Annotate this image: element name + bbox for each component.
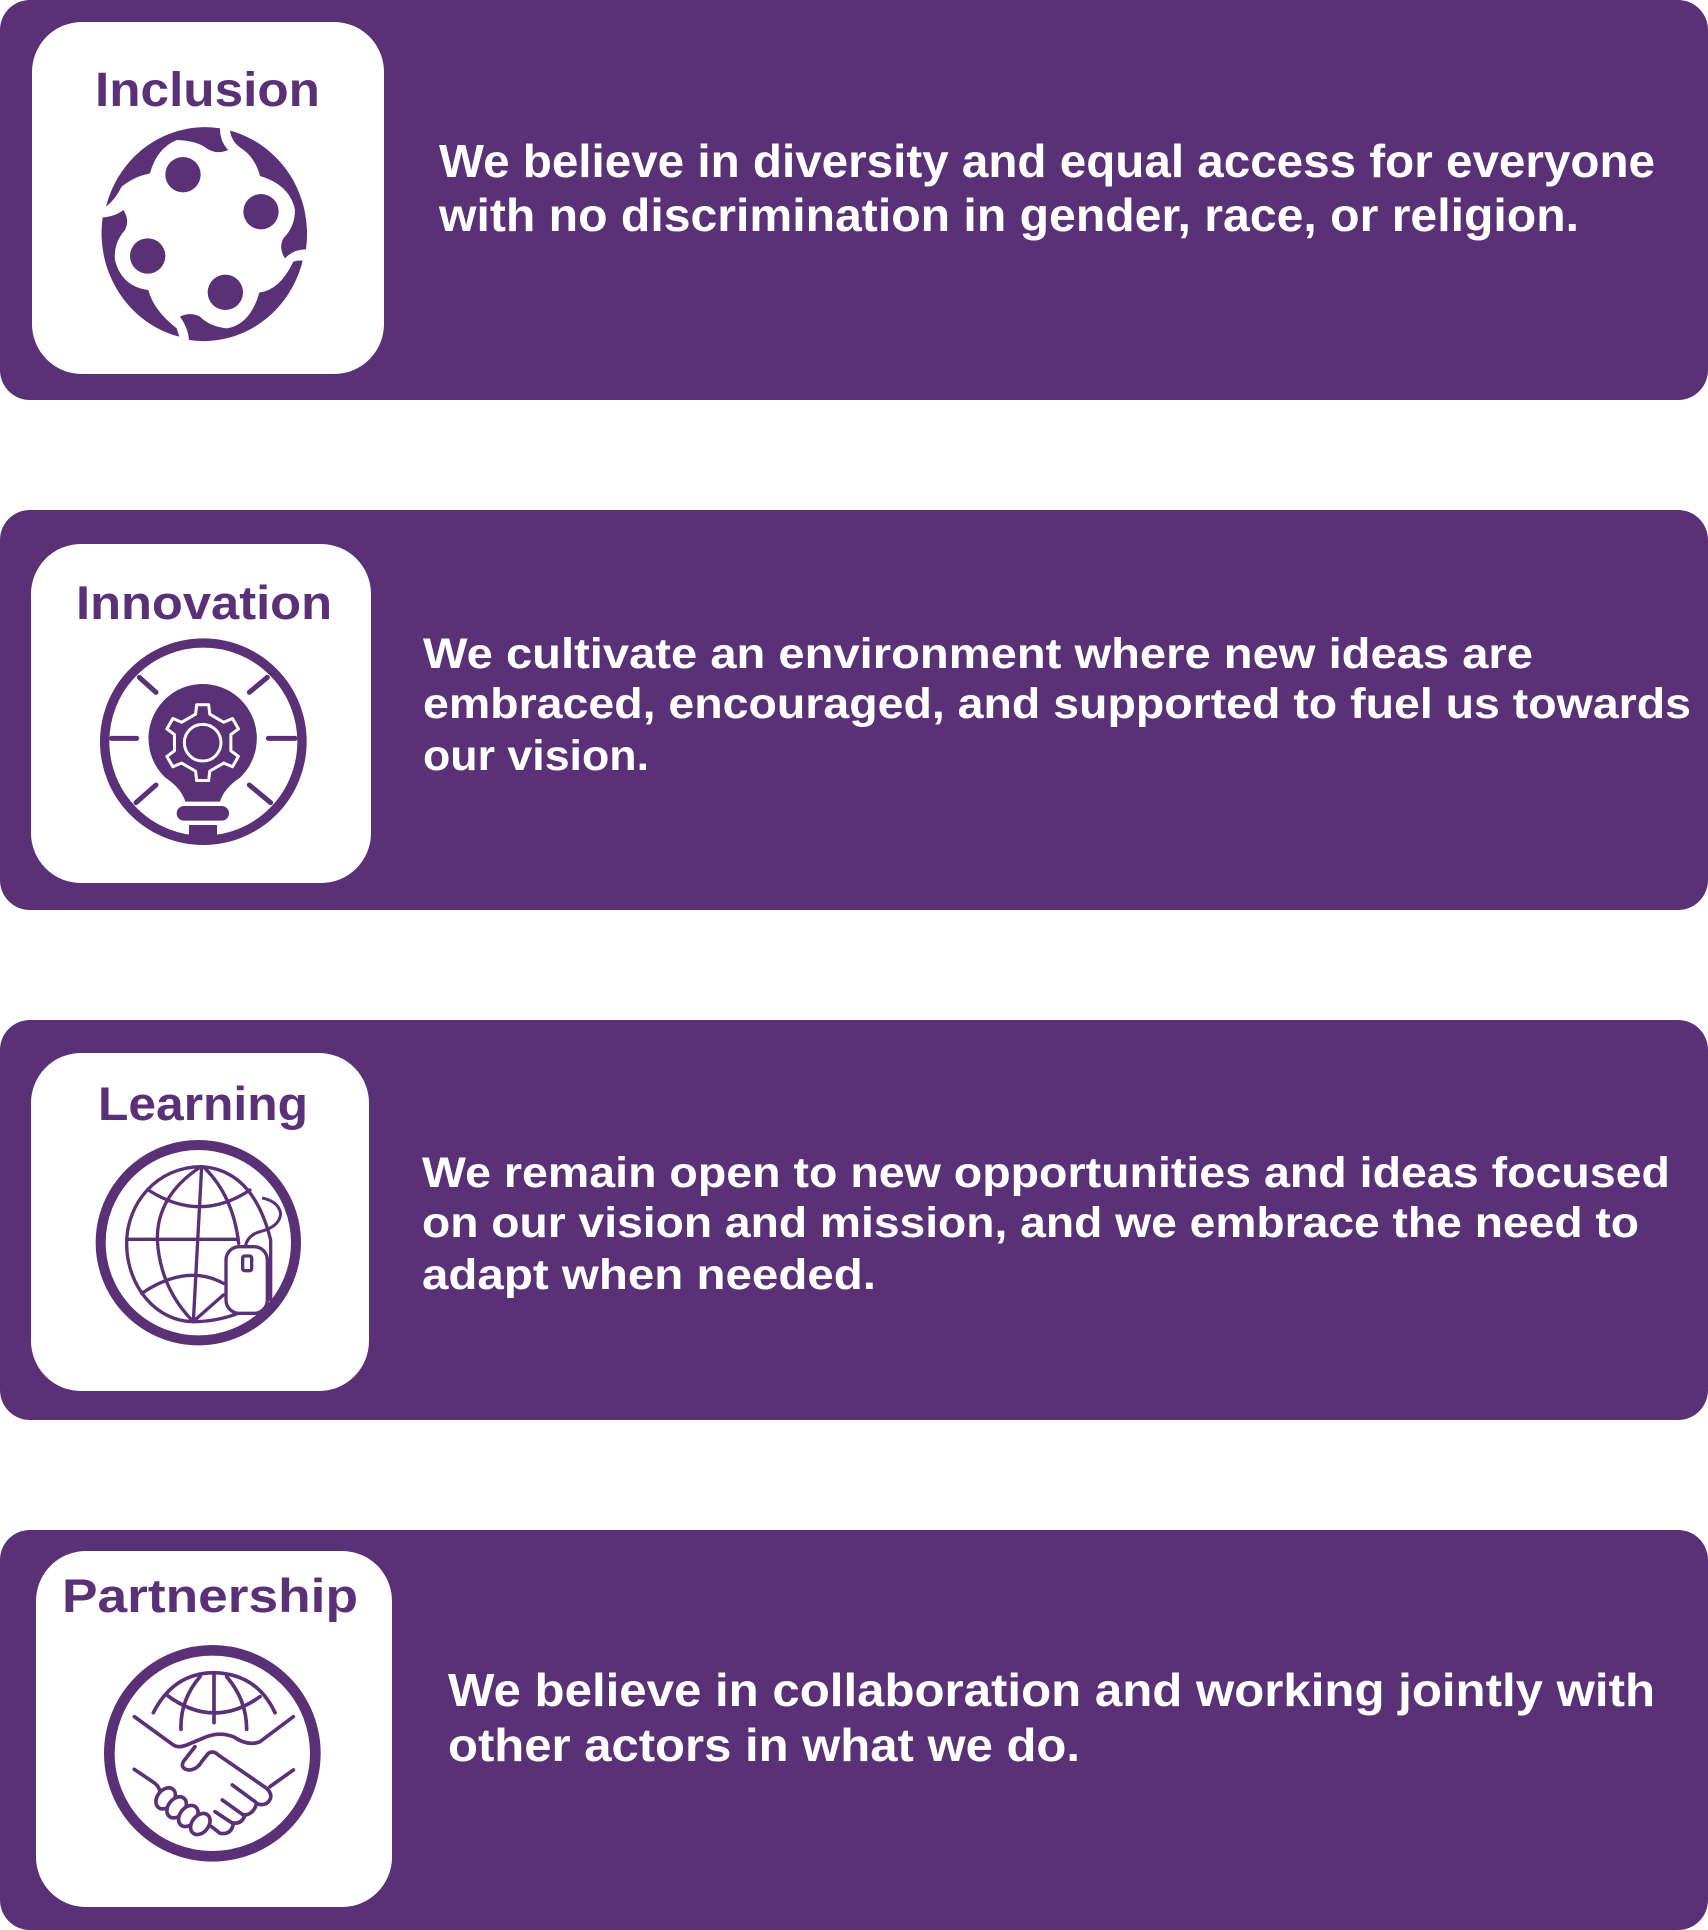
heading: inclusion: Inclusion xyxy=(95,64,320,117)
text: innovation description: our vision. xyxy=(423,732,649,780)
text: innovation description: embraced, encouraged, and supported to fuel us towards xyxy=(423,680,1691,728)
card: inclusion xyxy=(32,22,384,374)
panel: partnership xyxy=(0,1530,1708,1930)
panel: innovation xyxy=(0,510,1708,910)
text: learning description: adapt when needed. xyxy=(422,1251,876,1299)
text: inclusion description: We believe in diversity and equal access for everyone xyxy=(439,135,1655,187)
icon: globe with computer mouse xyxy=(101,1145,296,1340)
heading: learning: Learning xyxy=(98,1077,308,1130)
card: partnership xyxy=(36,1551,392,1907)
text: learning description xyxy=(422,1149,1670,1299)
text: partnership description: We believe in collaboration and working jointly with xyxy=(448,1664,1655,1716)
heading: partnership: Partnership xyxy=(62,1569,358,1622)
card: learning xyxy=(31,1053,369,1391)
text: learning description: We remain open to new opportunities and ideas focused xyxy=(422,1149,1670,1197)
text: partnership description: other actors in what we do. xyxy=(448,1719,1080,1771)
text: inclusion description: with no discrimination in gender, race, or religion. xyxy=(438,189,1579,241)
icon: people circle xyxy=(102,127,307,341)
icon: handshake and globe xyxy=(109,1650,315,1856)
text: innovation description: We cultivate an environment where new ideas are xyxy=(423,630,1533,678)
panel: inclusion xyxy=(0,0,1708,400)
text: partnership description xyxy=(448,1664,1655,1771)
text: inclusion description xyxy=(438,135,1655,241)
text: learning description: on our vision and mission, and we embrace the need to xyxy=(422,1199,1639,1247)
icon: light bulb with gear xyxy=(105,643,302,840)
heading: innovation: Innovation xyxy=(76,576,332,629)
panel: learning xyxy=(0,1020,1708,1420)
text: innovation description xyxy=(423,630,1691,780)
card: innovation xyxy=(31,544,371,883)
